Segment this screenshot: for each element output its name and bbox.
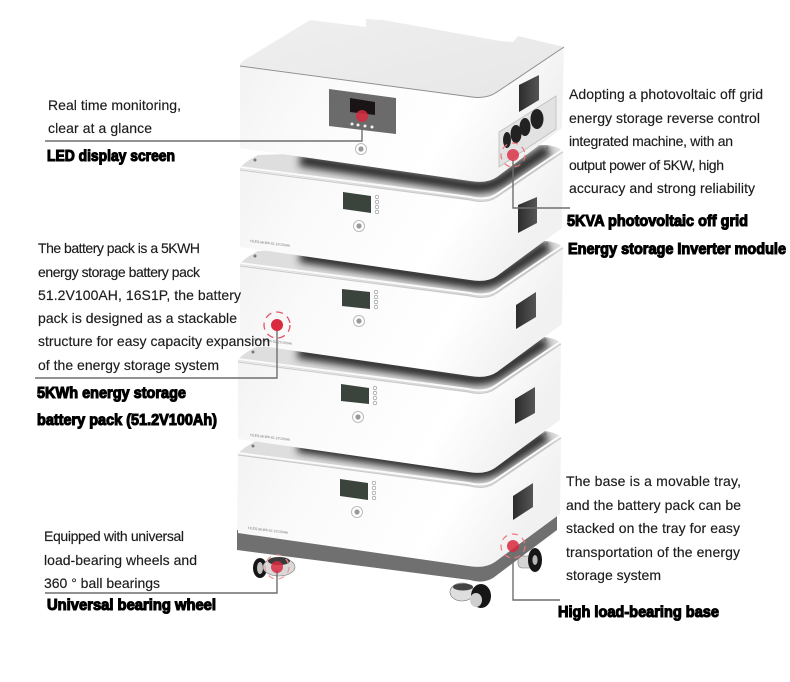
indicator lights (372, 481, 376, 500)
handle (518, 197, 537, 233)
leader line (45, 116, 362, 141)
heading: battery pack (51.2V100Ah) (37, 412, 217, 429)
marker (501, 534, 525, 558)
description: Equipped with universal (44, 528, 184, 544)
leader line (35, 325, 277, 378)
description (566, 473, 741, 583)
ports (503, 109, 544, 148)
callout: LED display (45, 97, 368, 165)
control panel (329, 89, 396, 134)
model label: HLES-5KWh-51.2V100Ah (248, 526, 288, 535)
heading: High load-bearing base (558, 604, 719, 621)
leader line (513, 550, 560, 600)
handle (519, 75, 539, 112)
callout: wheels (44, 528, 289, 614)
description: output power of 5KW, high (569, 157, 724, 173)
grey tray (237, 510, 557, 582)
leader line (513, 160, 570, 208)
heading (37, 385, 217, 429)
battery pack 5 (238, 431, 561, 567)
battery pack 4 (238, 337, 561, 473)
heading: 5KVA photovoltaic off grid (567, 213, 748, 230)
description: stacked on the tray for easy (566, 520, 740, 536)
description: transportation of the energy (566, 544, 740, 560)
model label: HLES-5KWh-51.2V100Ah (250, 433, 290, 442)
heading: Universal bearing wheel (47, 597, 216, 614)
battery pack 3 (240, 241, 563, 377)
callout: inverter module (501, 86, 786, 258)
indicator lights (373, 386, 377, 405)
description: Real time monitoring, (48, 97, 181, 113)
description: integrated machine, with an (569, 133, 733, 149)
model label: HLES-5KWh-51.2V100Ah (252, 337, 292, 346)
description: energy storage reverse control (569, 110, 760, 126)
top surface (240, 19, 564, 97)
marker (265, 555, 289, 579)
heading: LED display screen (47, 148, 175, 165)
power button (354, 220, 364, 232)
description: accuracy and strong reliability (569, 180, 755, 196)
description: load-bearing wheels and (44, 552, 197, 568)
description: Adopting a photovoltaic off grid (569, 86, 763, 102)
display (341, 384, 369, 404)
heading (567, 213, 786, 258)
illustration: battery stack (237, 19, 564, 608)
indicator lights (375, 195, 379, 214)
power button (352, 412, 364, 422)
display (343, 192, 371, 213)
description (44, 528, 197, 591)
indicator lights (374, 290, 378, 309)
marker (356, 110, 368, 122)
description: of the energy storage system (38, 357, 219, 373)
callout: base (501, 473, 741, 621)
heading: 5KWh energy storage (37, 385, 186, 402)
description: 360 ° ball bearings (44, 575, 160, 591)
display (340, 479, 368, 500)
inverter module (240, 19, 564, 182)
marker (264, 312, 290, 338)
marker (501, 143, 525, 167)
display (342, 289, 370, 309)
callout: battery pack (35, 240, 290, 429)
port cutout (499, 96, 556, 167)
description: energy storage battery pack (38, 264, 201, 280)
power button (352, 506, 362, 518)
power button (356, 144, 366, 154)
description: pack is designed as a stackable (38, 310, 237, 326)
description: structure for easy capacity expansion (38, 333, 270, 349)
description (38, 240, 270, 373)
battery pack 2 (240, 145, 563, 281)
description: 51.2V100AH, 16S1P, the battery (38, 287, 241, 303)
description: The base is a movable tray, (566, 473, 741, 489)
icon: front middle wheel (450, 583, 491, 608)
icon: front left wheel (253, 557, 295, 578)
description: clear at a glance (48, 120, 152, 136)
LED screen (350, 98, 375, 115)
handle (516, 292, 536, 329)
leader line (45, 570, 277, 593)
description (569, 86, 763, 196)
model label: HLES-5KWh-51.2V100Ah (250, 239, 290, 248)
panel buttons (350, 122, 374, 128)
front face (240, 47, 564, 182)
power button (354, 316, 364, 326)
icon: rear wheel (518, 548, 542, 572)
handle (513, 483, 533, 520)
description: and the battery pack can be (566, 497, 741, 513)
description: storage system (566, 567, 661, 583)
description (48, 97, 181, 136)
description: The battery pack is a 5KWH (38, 240, 200, 256)
base unit with grey tray and wheels (237, 431, 561, 608)
handle (515, 387, 535, 424)
